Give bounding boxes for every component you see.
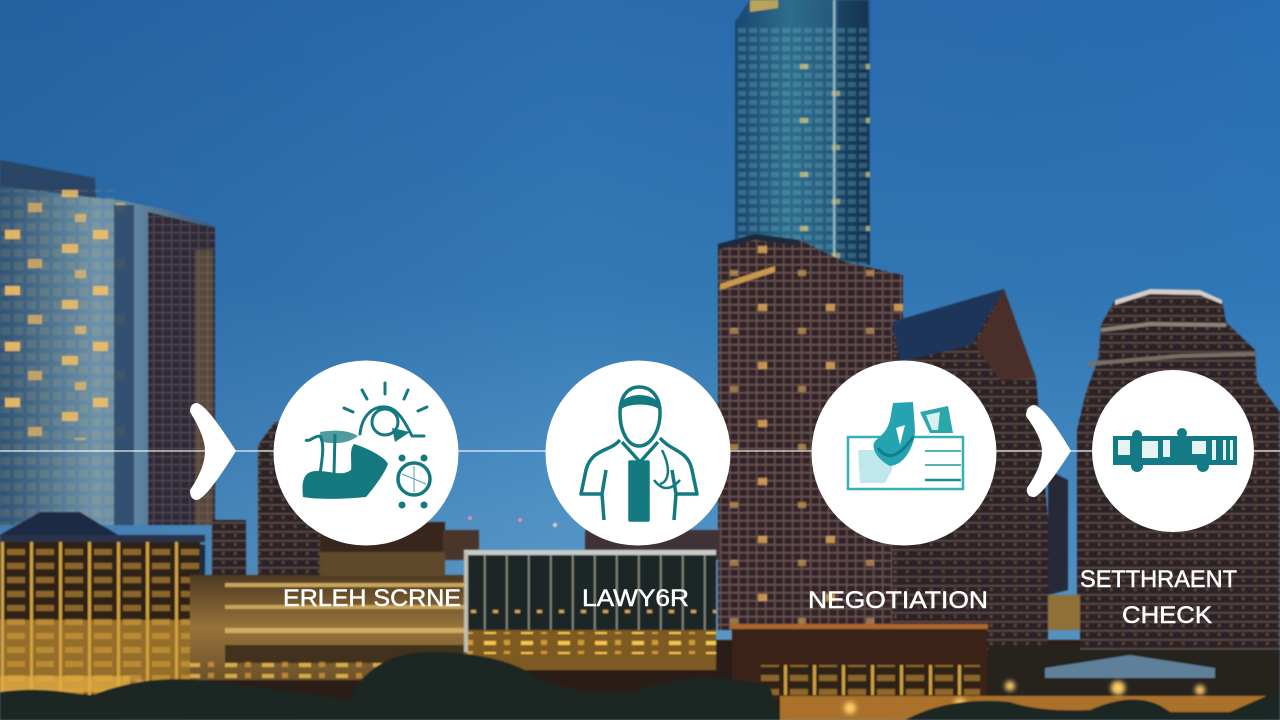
building: lit base of the brick tower [730,595,1280,705]
building: central glass spire [735,0,870,265]
circle badge: scene [274,360,458,546]
icon: accident scene [303,383,430,508]
building: brick tower [718,234,903,630]
building: dark pitched tower [892,289,1068,655]
step 3: negotiation [812,360,996,546]
circle badge: lawyer [546,360,730,546]
building: dark glass pavilion [464,550,716,670]
step 1: scene [274,360,458,546]
glowing street lights [0,516,1280,720]
label: step 2: LAWY6R [582,585,689,612]
label: step 3: NEGOTIATION [808,587,988,614]
arrow: chevron before step one [190,403,236,500]
label: step 4, two lines: CHECK [1122,602,1212,629]
circle badge: negotiation [812,360,996,546]
building: stepped round tower on the right [1077,289,1280,610]
label: step 1: ERLEH SCRNE [283,585,461,612]
building: low lit podium left [0,512,205,700]
treeline [0,652,1280,720]
timeline connector line [0,450,1280,452]
building: left glass tower [0,160,215,525]
label: step 4, two lines: SETTHRAENT [1080,566,1237,593]
building: low lit block centre-left [190,552,470,680]
circle badge: settlement [1092,370,1254,532]
arrow: chevron before step four [1026,405,1071,497]
icon: lawyer figure [581,387,697,520]
step 2: lawyer [546,360,730,546]
building: small mid-rise towers [212,422,720,590]
icon: settlement figures [1113,428,1237,472]
step 4: settlement [1092,370,1254,532]
ground base [0,640,1280,720]
icon: cheque and hand [848,402,963,489]
